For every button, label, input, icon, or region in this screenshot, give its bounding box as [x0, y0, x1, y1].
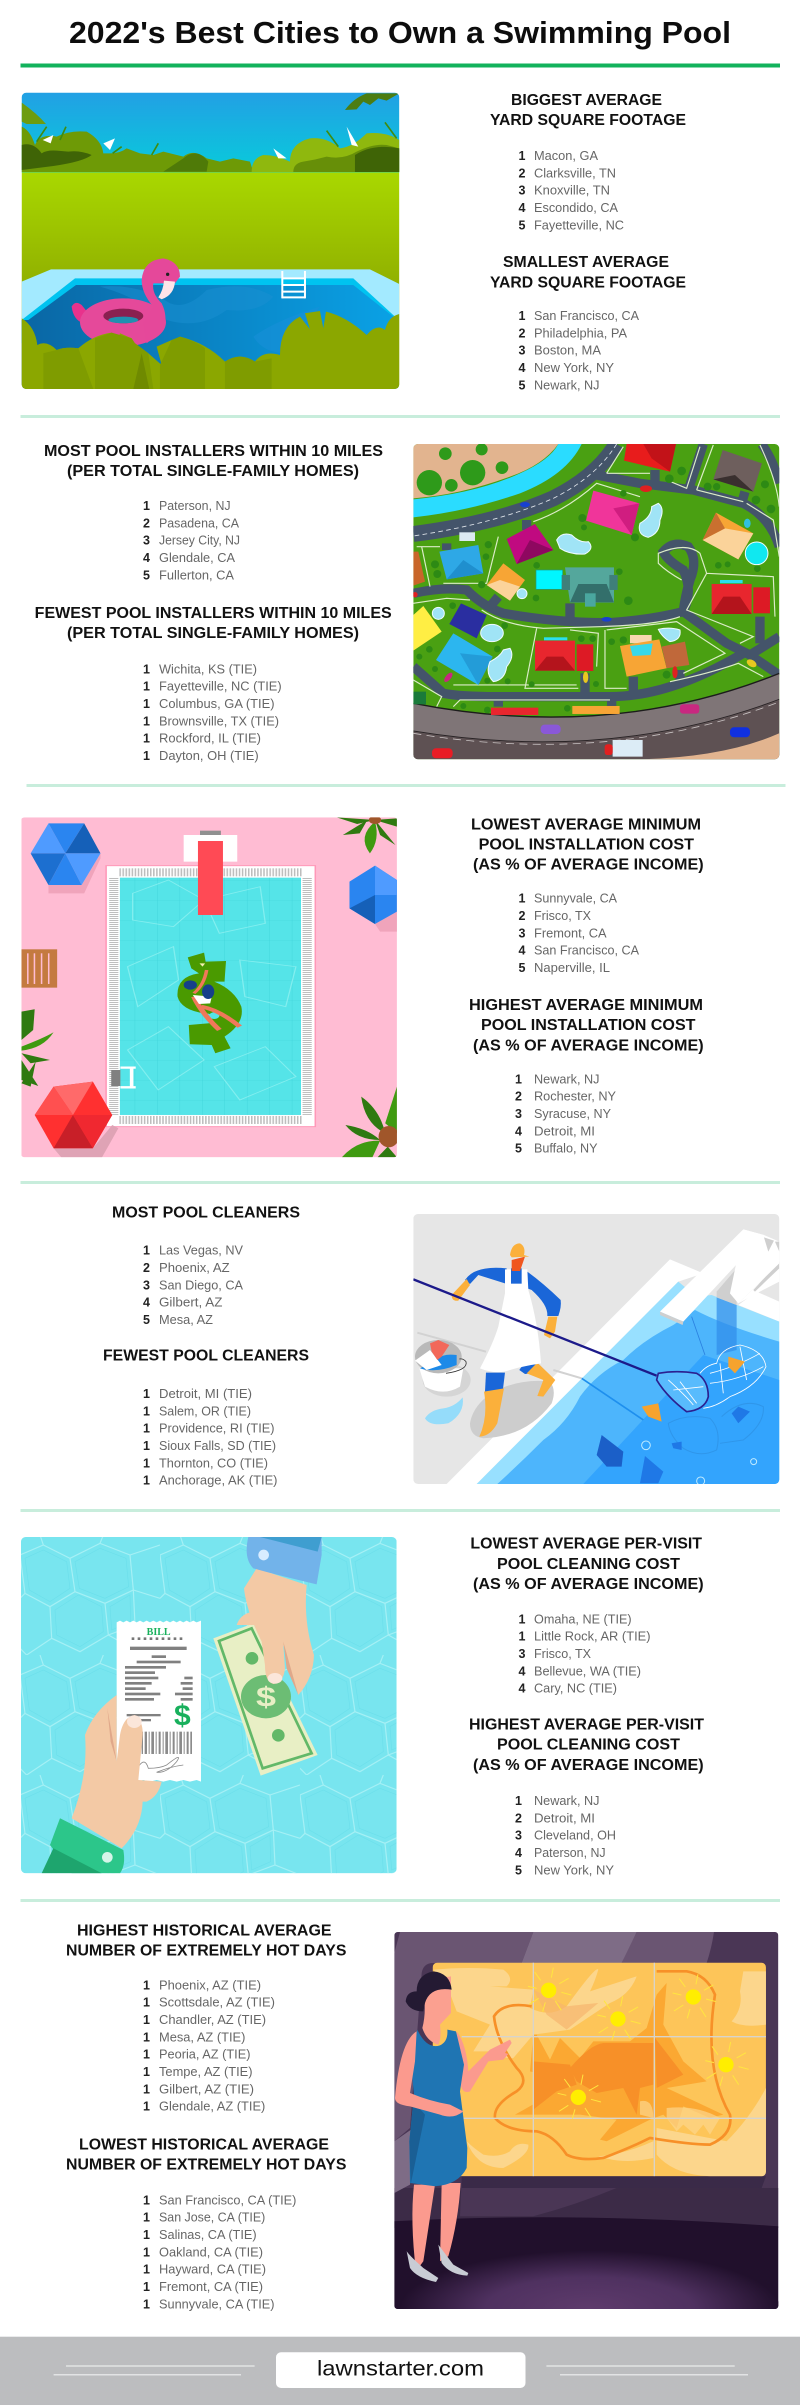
heading: smallest yard: YARD SQUARE FOOTAGE: [490, 274, 686, 292]
list: lowest install cost: 2: [519, 909, 526, 923]
list: highest hot days: Phoenix, AZ (TIE): [159, 1977, 261, 1992]
list: fewest cleaners: 1: [143, 1422, 150, 1436]
heading: fewest installers: (PER TOTAL SINGLE-FAMILY HOMES): [67, 625, 359, 642]
list: highest hot days: 1: [143, 1996, 150, 2010]
list: biggest yard: 2: [519, 166, 526, 180]
list: most installers: Paterson, NJ: [159, 498, 231, 513]
list: fewest cleaners: Detroit, MI (TIE): [159, 1386, 252, 1401]
heading: highest install cost: [469, 997, 704, 1054]
list: highest install cost: Buffalo, NY: [534, 1141, 598, 1156]
list: lowest hot days: 1: [143, 2280, 150, 2294]
list: highest install cost: 4: [515, 1124, 522, 1138]
illustration: woman on dollar float in pool: [21, 816, 399, 1157]
illustration: hands exchanging bill and dollar: [21, 1537, 397, 1873]
list: most cleaners: Las Vegas, NV: [159, 1243, 243, 1258]
list: biggest yard: Fayetteville, NC: [534, 217, 624, 232]
list: fewest cleaners: 1: [143, 1387, 150, 1401]
heading: biggest yard: BIGGEST AVERAGE: [511, 92, 662, 109]
list: most installers: 1: [143, 499, 150, 513]
list: lowest install cost: 3: [519, 926, 526, 940]
illustration: aerial neighbourhood with pools: [412, 443, 779, 759]
list: highest install cost: Syracuse, NY: [534, 1106, 611, 1121]
list: lowest install cost: Sunnyvale, CA: [534, 891, 617, 906]
list: fewest cleaners: Sioux Falls, SD (TIE): [159, 1438, 276, 1453]
list: fewest cleaners: 1: [143, 1474, 150, 1488]
list: most installers: 5: [143, 568, 150, 582]
list: fewest installers: 1: [143, 662, 150, 676]
list: highest cleaning cost: 5: [515, 1863, 522, 1877]
footer band: [0, 2337, 800, 2405]
list: fewest installers: Columbus, GA (TIE): [159, 696, 274, 711]
list: lowest hot days: Oakland, CA (TIE): [159, 2244, 263, 2259]
heading: lowest cleaning cost: LOWEST AVERAGE PER-VISIT: [470, 1536, 702, 1553]
list: smallest yard: New York, NY: [534, 360, 614, 375]
list: highest cleaning cost: New York, NY: [534, 1862, 614, 1877]
list: lowest install cost: Naperville, IL: [534, 960, 610, 975]
heading: smallest yard: [490, 254, 686, 292]
panel: pool installers: [35, 443, 779, 763]
list: most cleaners: Mesa, AZ: [159, 1312, 213, 1327]
list: smallest yard: 2: [519, 326, 526, 340]
list: biggest yard: Escondido, CA: [534, 200, 618, 215]
list: most cleaners: San Diego, CA: [159, 1277, 243, 1292]
heading: fewest cleaners: FEWEST POOL CLEANERS: [103, 1348, 309, 1365]
list: lowest cleaning cost: 4: [519, 1682, 526, 1696]
list: highest cleaning cost: Cleveland, OH: [534, 1828, 616, 1843]
list: smallest yard: 1: [519, 309, 526, 323]
list: lowest cleaning cost: [519, 1611, 650, 1696]
list: lowest hot days: 1: [143, 2245, 150, 2259]
list: highest cleaning cost: 3: [515, 1829, 522, 1843]
list: lowest hot days: Hayward, CA (TIE): [159, 2262, 266, 2277]
heading: highest hot days: NUMBER OF EXTREMELY HOT DAYS: [66, 1943, 347, 1960]
list: lowest install cost: 1: [519, 892, 526, 906]
list: fewest cleaners: Thornton, CO (TIE): [159, 1455, 268, 1470]
heading: most installers: [44, 443, 383, 480]
heading: fewest installers: FEWEST POOL INSTALLERS WITHIN 10 MILES: [35, 605, 392, 622]
title: 2022's Best Cities to Own a Swimming Pool: [69, 16, 731, 50]
illustration: flamingo float in backyard pool: [22, 93, 399, 389]
list: highest hot days: 1: [143, 2030, 150, 2044]
heading: lowest cleaning cost: (AS % OF AVERAGE INCOME): [473, 1576, 704, 1593]
title underline: [20, 64, 780, 68]
heading: most cleaners: MOST POOL CLEANERS: [112, 1204, 300, 1221]
list: lowest install cost: [519, 891, 639, 975]
list: lowest cleaning cost: 3: [519, 1647, 526, 1661]
list: lowest hot days: 1: [143, 2263, 150, 2277]
list: fewest installers: 1: [143, 697, 150, 711]
list: fewest cleaners: 1: [143, 1439, 150, 1453]
panel: pool cleaners: [103, 1204, 779, 1488]
list: most installers: 3: [143, 534, 150, 548]
list: most cleaners: Gilbert, AZ: [159, 1295, 222, 1310]
heading: highest hot days: HIGHEST HISTORICAL AVERAGE: [77, 1922, 332, 1939]
list: highest install cost: Detroit, MI: [534, 1123, 595, 1138]
list: most installers: Jersey City, NJ: [159, 533, 240, 548]
list: highest cleaning cost: 4: [515, 1846, 522, 1860]
list: highest hot days: Gilbert, AZ (TIE): [159, 2081, 254, 2096]
heading: highest cleaning cost: [469, 1716, 704, 1774]
heading: lowest install cost: LOWEST AVERAGE MINIMUM: [471, 816, 701, 833]
illustration: pool cleaner skimming leaves: [413, 1214, 779, 1485]
list: smallest yard: Philadelphia, PA: [534, 325, 627, 340]
list: most cleaners: Phoenix, AZ: [159, 1260, 230, 1275]
heading: highest install cost: POOL INSTALLATION COST: [481, 1017, 696, 1034]
heading: most installers: MOST POOL INSTALLERS WITHIN 10 MILES: [44, 443, 383, 460]
heading: highest cleaning cost: (AS % OF AVERAGE INCOME): [473, 1757, 704, 1774]
list: highest cleaning cost: Detroit, MI: [534, 1810, 595, 1825]
list: fewest installers: 1: [143, 749, 150, 763]
list: lowest cleaning cost: Omaha, NE (TIE): [534, 1611, 632, 1626]
list: lowest install cost: 4: [519, 944, 526, 958]
list: fewest installers: [143, 661, 282, 763]
list: smallest yard: San Francisco, CA: [534, 308, 639, 323]
heading: highest install cost: HIGHEST AVERAGE MINIMUM: [469, 997, 703, 1014]
list: lowest install cost: San Francisco, CA: [534, 943, 639, 958]
list: biggest yard: [519, 148, 624, 232]
list: most installers: 4: [143, 551, 150, 565]
list: fewest cleaners: [143, 1386, 278, 1488]
list: lowest cleaning cost: 1: [519, 1630, 526, 1644]
panel: yard square footage: [22, 92, 686, 392]
list: fewest cleaners: 1: [143, 1404, 150, 1418]
list: highest install cost: 3: [515, 1107, 522, 1121]
list: fewest installers: Dayton, OH (TIE): [159, 748, 259, 763]
list: highest install cost: 5: [515, 1142, 522, 1156]
list: biggest yard: 3: [519, 184, 526, 198]
list: fewest installers: 1: [143, 680, 150, 694]
list: most installers: Glendale, CA: [159, 550, 235, 565]
panel: extremely hot days: [67, 1924, 778, 2311]
list: highest cleaning cost: [515, 1793, 616, 1877]
list: biggest yard: Macon, GA: [534, 148, 598, 163]
heading: fewest installers: [35, 605, 392, 642]
list: highest install cost: Rochester, NY: [534, 1089, 616, 1104]
heading: lowest install cost: [471, 816, 704, 873]
list: lowest install cost: Frisco, TX: [534, 908, 591, 923]
list: lowest cleaning cost: 4: [519, 1664, 526, 1678]
list: lowest hot days: 1: [143, 2193, 150, 2207]
list: highest cleaning cost: 1: [515, 1794, 522, 1808]
heading: lowest cleaning cost: POOL CLEANING COST: [497, 1556, 680, 1573]
list: highest hot days: Scottsdale, AZ (TIE): [159, 1995, 275, 2010]
list: lowest install cost: 5: [519, 961, 526, 975]
list: most cleaners: 5: [143, 1313, 150, 1327]
list: most cleaners: 4: [143, 1296, 150, 1310]
heading: smallest yard: SMALLEST AVERAGE: [503, 254, 669, 271]
panel: pool cleaning cost: [21, 1536, 704, 1877]
list: fewest installers: Rockford, IL (TIE): [159, 731, 261, 746]
list: highest hot days: 1: [143, 2013, 150, 2027]
list: highest hot days: 1: [143, 1978, 150, 1992]
list: biggest yard: 4: [519, 201, 526, 215]
list: lowest cleaning cost: Bellevue, WA (TIE): [534, 1663, 641, 1678]
illustration: hands exchanging bill and dollar: BILL: [147, 1627, 171, 1638]
list: fewest cleaners: Salem, OR (TIE): [159, 1403, 251, 1418]
illustration: weather presenter and heat map: [394, 1932, 778, 2309]
heading: lowest hot days: NUMBER OF EXTREMELY HOT DAYS: [66, 2156, 347, 2173]
list: highest hot days: 1: [143, 2100, 150, 2114]
list: highest hot days: 1: [143, 2048, 150, 2062]
list: highest cleaning cost: Paterson, NJ: [534, 1845, 606, 1860]
list: biggest yard: 5: [519, 218, 526, 232]
panel: pool installation cost: [21, 816, 704, 1157]
list: fewest installers: 1: [143, 714, 150, 728]
list: highest install cost: 1: [515, 1072, 522, 1086]
list: most installers: 2: [143, 516, 150, 530]
list: most installers: [143, 498, 240, 582]
list: highest hot days: Mesa, AZ (TIE): [159, 2029, 245, 2044]
list: biggest yard: 1: [519, 149, 526, 163]
list: smallest yard: 3: [519, 344, 526, 358]
list: fewest cleaners: 1: [143, 1456, 150, 1470]
list: highest hot days: Tempe, AZ (TIE): [159, 2064, 252, 2079]
heading: highest install cost: (AS % OF AVERAGE INCOME): [473, 1037, 704, 1054]
list: most cleaners: 1: [143, 1244, 150, 1258]
list: biggest yard: Knoxville, TN: [534, 183, 610, 198]
list: lowest hot days: Salinas, CA (TIE): [159, 2227, 257, 2242]
list: most installers: Fullerton, CA: [159, 567, 234, 582]
list: highest hot days: Glendale, AZ (TIE): [159, 2099, 265, 2114]
list: highest install cost: 2: [515, 1090, 522, 1104]
list: highest cleaning cost: Newark, NJ: [534, 1793, 600, 1808]
list: fewest cleaners: Anchorage, AK (TIE): [159, 1473, 278, 1488]
list: lowest hot days: San Jose, CA (TIE): [159, 2210, 265, 2225]
heading: highest hot days: [66, 1922, 347, 1960]
list: highest hot days: [143, 1977, 275, 2114]
list: most installers: Pasadena, CA: [159, 515, 239, 530]
logo box: [276, 2352, 526, 2388]
heading: lowest install cost: (AS % OF AVERAGE INCOME): [473, 856, 704, 873]
heading: lowest install cost: POOL INSTALLATION COST: [479, 836, 694, 853]
list: most cleaners: [143, 1243, 243, 1327]
heading: lowest hot days: [66, 2136, 347, 2173]
list: smallest yard: 4: [519, 361, 526, 375]
list: lowest cleaning cost: Cary, NC (TIE): [534, 1681, 617, 1696]
list: highest hot days: 1: [143, 2065, 150, 2079]
list: fewest installers: Wichita, KS (TIE): [159, 661, 257, 676]
list: lowest hot days: 1: [143, 2228, 150, 2242]
heading: highest cleaning cost: HIGHEST AVERAGE PER-VISIT: [469, 1716, 704, 1733]
illustration: hands exchanging bill and dollar: $: [256, 1682, 277, 1713]
list: lowest hot days: 1: [143, 2211, 150, 2225]
list: smallest yard: [519, 308, 639, 392]
heading: lowest cleaning cost: [470, 1536, 704, 1593]
list: lowest cleaning cost: Frisco, TX: [534, 1646, 591, 1661]
heading: most installers: (PER TOTAL SINGLE-FAMILY HOMES): [67, 463, 359, 480]
list: lowest hot days: [143, 2192, 296, 2311]
list: fewest installers: Brownsville, TX (TIE): [159, 713, 279, 728]
list: biggest yard: Clarksville, TN: [534, 165, 616, 180]
list: lowest hot days: 1: [143, 2297, 150, 2311]
heading: biggest yard: YARD SQUARE FOOTAGE: [490, 112, 686, 129]
heading: lowest hot days: LOWEST HISTORICAL AVERAGE: [79, 2136, 329, 2153]
list: most cleaners: 2: [143, 1261, 150, 1275]
logo text: lawnstarter.com: [317, 2357, 484, 2380]
list: highest hot days: Chandler, AZ (TIE): [159, 2012, 266, 2027]
list: highest cleaning cost: 2: [515, 1811, 522, 1825]
list: smallest yard: Newark, NJ: [534, 377, 600, 392]
list: lowest install cost: Fremont, CA: [534, 925, 607, 940]
list: most cleaners: 3: [143, 1278, 150, 1292]
heading: highest cleaning cost: POOL CLEANING COST: [497, 1737, 680, 1754]
list: lowest cleaning cost: Little Rock, AR (TIE): [534, 1629, 650, 1644]
list: highest hot days: 1: [143, 2082, 150, 2096]
list: fewest installers: 1: [143, 732, 150, 746]
heading: biggest yard: [490, 92, 686, 129]
list: highest hot days: Peoria, AZ (TIE): [159, 2047, 250, 2062]
list: lowest hot days: Fremont, CA (TIE): [159, 2279, 263, 2294]
list: smallest yard: Boston, MA: [534, 343, 601, 358]
list: highest install cost: Newark, NJ: [534, 1071, 600, 1086]
illustration: hands exchanging bill and dollar: $: [174, 1700, 191, 1733]
list: lowest cleaning cost: 1: [519, 1612, 526, 1626]
list: smallest yard: 5: [519, 378, 526, 392]
list: fewest cleaners: Providence, RI (TIE): [159, 1421, 274, 1436]
list: fewest installers: Fayetteville, NC (TIE): [159, 679, 282, 694]
list: lowest hot days: Sunnyvale, CA (TIE): [159, 2296, 274, 2311]
list: lowest hot days: San Francisco, CA (TIE): [159, 2192, 296, 2207]
list: highest install cost: [515, 1071, 616, 1156]
